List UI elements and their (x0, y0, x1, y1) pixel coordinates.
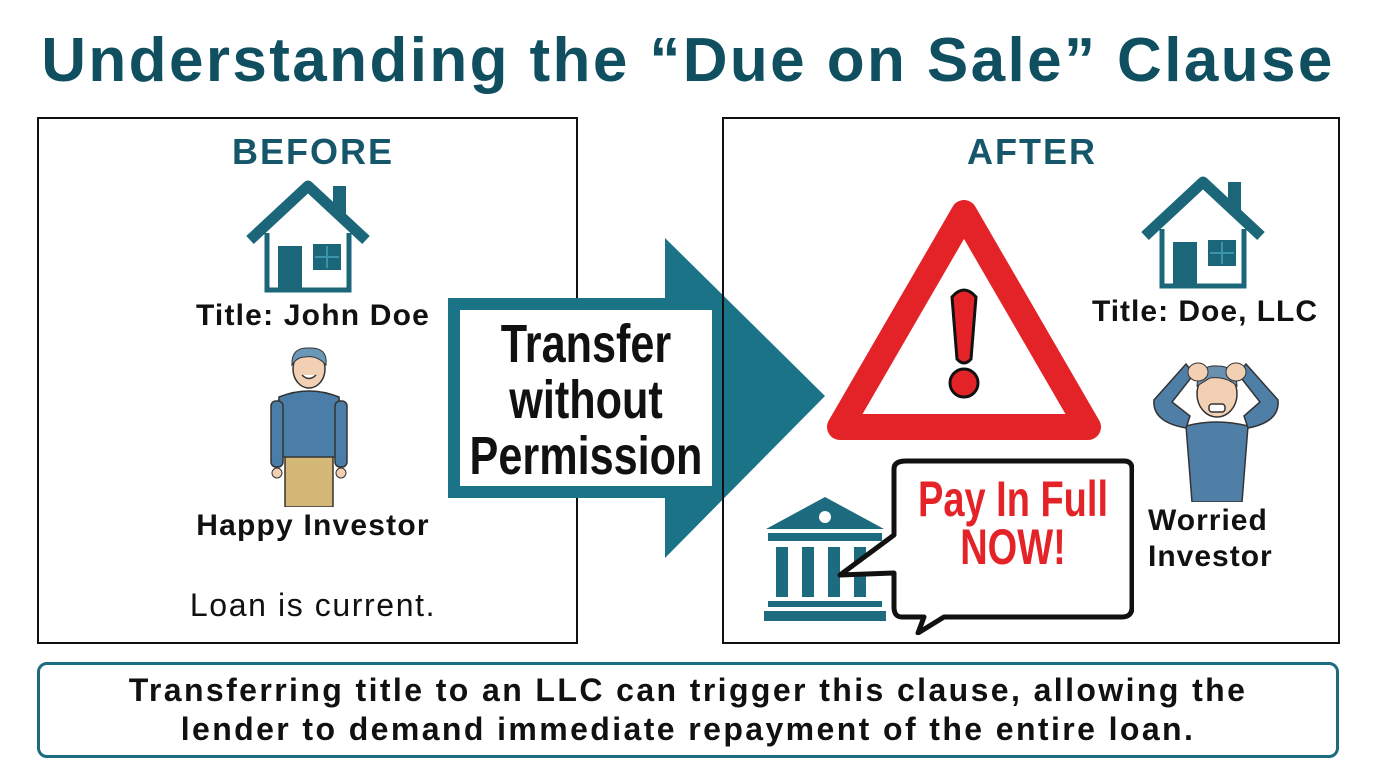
heading: before: BEFORE (232, 131, 394, 172)
text: worried investor: Investor (1148, 540, 1273, 573)
text: callout (918, 471, 1108, 575)
icon: house llc (1141, 176, 1265, 288)
text: arrow label: Permission (470, 426, 702, 486)
panel: after (722, 117, 1340, 644)
text: arrow label: Transfer (501, 314, 671, 374)
text: worried investor (1148, 504, 1273, 573)
text: callout: Pay In Full (918, 471, 1108, 527)
icon: worried investor (1153, 362, 1279, 502)
text: arrow label (470, 314, 702, 486)
callout: pay in full now (838, 458, 1134, 635)
icon: house (246, 180, 370, 292)
callout box: summary: Transferring title to an LLC can trigger this clause, allowing the (129, 672, 1247, 708)
text: happy investor: Happy Investor (196, 509, 430, 542)
title: Understanding the “Due on Sale” Clause (41, 26, 1335, 95)
text: loan is current: Loan is current. (190, 587, 436, 623)
text: title john doe: Title: John Doe (196, 299, 430, 332)
icon: warning triangle (827, 200, 1101, 440)
arrow: transfer without permission (448, 238, 825, 558)
heading: after: AFTER (967, 131, 1097, 172)
icon: bank (764, 497, 886, 621)
callout box: summary: lender to demand immediate repayment of the entire loan. (181, 711, 1195, 747)
icon: happy investor (270, 348, 348, 507)
text: callout: NOW! (960, 519, 1066, 575)
text: arrow label: without (509, 370, 663, 430)
panel: before (37, 117, 578, 644)
text: worried investor: Worried (1148, 504, 1268, 537)
callout box: summary (37, 662, 1339, 758)
text: title doe llc: Title: Doe, LLC (1092, 295, 1318, 328)
